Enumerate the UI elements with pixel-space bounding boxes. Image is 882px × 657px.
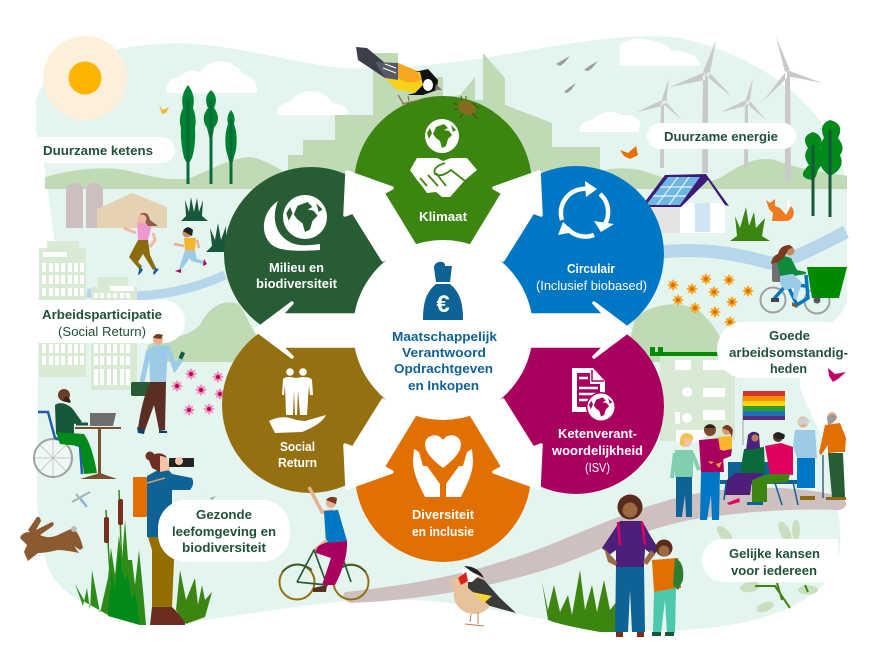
label: en inclusie	[412, 525, 474, 539]
icon: money bag	[423, 262, 463, 320]
icon: rabbit	[20, 517, 83, 561]
white centre with arrows	[256, 172, 630, 488]
wind turbines	[637, 37, 822, 182]
label: Gezonde leefomgeving	[158, 500, 290, 562]
farm: silos and barn	[66, 183, 167, 228]
label: Gezonde leefomgeving: Gezonde	[196, 508, 252, 522]
hills	[45, 157, 847, 362]
rivers	[87, 232, 846, 296]
house with solar panels	[641, 174, 729, 233]
birdwatcher	[133, 452, 194, 625]
wheelchair user	[34, 389, 121, 479]
label: Milieu en	[269, 261, 324, 275]
label: Duurzame ketens	[36, 137, 175, 163]
label: Gelijke kansen: voor iedereen	[731, 564, 817, 578]
building right	[650, 347, 735, 442]
label: Klimaat	[419, 210, 468, 224]
clouds	[167, 38, 700, 132]
label: Gezonde leefomgeving: biodiversiteit	[182, 541, 267, 555]
label: Goede arbeidsomstandigheden	[717, 322, 853, 378]
label: Goede arbeidsomstandigheden: heden	[770, 362, 807, 376]
icon: money bag: €	[436, 291, 450, 318]
label: Social	[280, 440, 315, 454]
icon: dragonfly 2	[204, 492, 216, 500]
panel: Ketenverantwoordelijkheid	[551, 368, 643, 475]
centre title: Maatschappelijk	[392, 329, 498, 344]
runner woman	[124, 213, 159, 275]
label: Ketenverant-	[558, 427, 637, 441]
label: Duurzame energie	[647, 123, 796, 149]
runner child	[174, 227, 207, 273]
label	[278, 440, 317, 470]
cyclist	[280, 487, 368, 600]
label: Diversiteit	[412, 508, 475, 522]
mother and child	[602, 494, 683, 637]
icon: people on hand	[269, 368, 326, 433]
label: Return	[278, 456, 317, 470]
icon: tit bird	[356, 47, 442, 104]
flowers orange	[667, 273, 754, 328]
man with briefcase	[131, 334, 185, 434]
icon: dragonfly	[72, 492, 90, 507]
label	[536, 262, 647, 293]
panel: Klimaat	[410, 119, 477, 224]
buildings left	[39, 241, 137, 390]
centre title: Opdrachtgeven	[394, 361, 493, 376]
icon: sun	[43, 36, 127, 120]
icon: cycle arrows	[558, 181, 614, 237]
grass clumps	[181, 197, 232, 252]
label	[256, 261, 338, 291]
icon: beetle	[453, 96, 480, 119]
panel: Circulair	[536, 181, 647, 293]
label	[551, 427, 643, 475]
label: Arbeidsparticipatie: Arbeidsparticipatie	[42, 308, 162, 322]
panel: Diversiteit en inclusie	[412, 435, 475, 539]
path	[343, 488, 846, 603]
panel: Milieu en biodiversiteit	[256, 195, 338, 291]
icon: butterfly yellow	[159, 105, 169, 114]
icon: fox	[766, 198, 794, 221]
icon: document and globe	[572, 368, 616, 422]
label: (Inclusief biobased)	[536, 279, 647, 293]
label: Duurzame ketens: Duurzame ketens	[43, 144, 153, 158]
centre title: Verantwoord	[402, 345, 486, 360]
flying birds	[556, 56, 598, 93]
label: Goede arbeidsomstandigheden: Goede	[769, 329, 810, 343]
cargo bike rider	[760, 245, 847, 314]
label: biodiversiteit	[256, 277, 338, 291]
grass right	[730, 207, 770, 241]
label: Gezonde leefomgeving: leefomgeving en	[172, 525, 276, 539]
centre title	[392, 329, 498, 393]
icon: globe and handshake	[410, 119, 477, 197]
city skyline	[288, 53, 600, 190]
label: Duurzame energie: Duurzame energie	[664, 130, 778, 144]
grass front	[542, 570, 618, 632]
label: Gelijke kansen: Gelijke kansen	[729, 547, 820, 561]
trees left	[180, 85, 237, 184]
label: Arbeidsparticipatie	[36, 300, 185, 343]
label: Circulair	[567, 262, 615, 276]
panel: circle segments	[222, 96, 664, 562]
icon: heart in hands	[413, 435, 473, 497]
label: Goede arbeidsomstandigheden: arbeidsomstandig-	[729, 346, 848, 360]
group of people	[672, 391, 846, 520]
pink flowers	[171, 368, 226, 416]
icon: butterfly orange	[620, 146, 638, 159]
plants near label	[714, 520, 818, 614]
reeds	[75, 490, 212, 625]
centre title: en Inkopen	[408, 378, 479, 393]
icon: leaf and globe	[264, 195, 327, 251]
label: Gelijke kansen	[702, 539, 838, 582]
trees right	[803, 120, 843, 180]
label: (ISV)	[585, 461, 610, 475]
goldfinch bird	[450, 566, 516, 626]
panel: Social Return	[269, 368, 326, 470]
label: woordelijkheid	[551, 444, 643, 458]
label: Arbeidsparticipatie: (Social Return)	[58, 325, 146, 339]
label	[412, 508, 475, 539]
icon: butterfly pink	[828, 368, 846, 382]
